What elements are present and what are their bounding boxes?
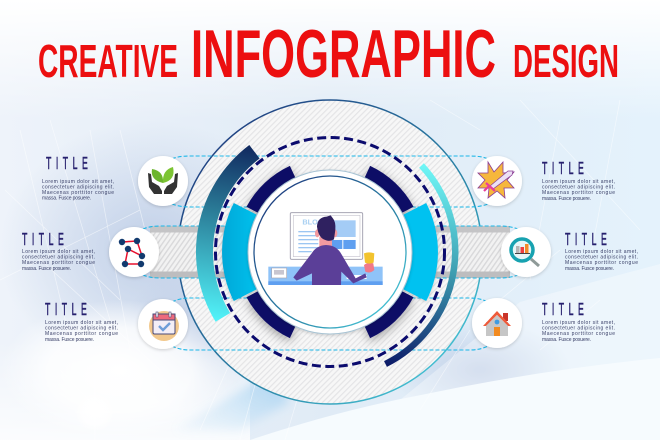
- cyan segments: [222, 203, 438, 301]
- text block: right middle: consectetuer adipiscing elit.: [565, 254, 638, 260]
- text block: left middle: Maecenas porttitor congue: [22, 260, 95, 266]
- text block: right bottom: massa. Fusce posuere.: [542, 337, 591, 343]
- text block: left bottom: Lorem ipsum dolor sit amet,: [45, 320, 118, 326]
- navy segments: [246, 166, 414, 338]
- central grey band: [150, 226, 510, 278]
- icon circle: calendar: [138, 299, 188, 349]
- text block: left middle: consectetuer adipiscing elit.: [22, 254, 95, 260]
- text block: right bottom: TITLE: [542, 299, 588, 319]
- text block: right bottom: Lorem ipsum dolor sit amet,: [542, 320, 615, 326]
- icon circle: sword star: [472, 156, 522, 206]
- text block: left bottom: massa. Fusce posuere.: [45, 337, 94, 343]
- text block: left middle: TITLE: [22, 229, 68, 249]
- text block: right top: TITLE: [542, 158, 588, 178]
- text block: left top: massa. Fusce posuere.: [42, 196, 91, 202]
- text block: right top: Lorem ipsum dolor sit amet,: [542, 179, 615, 185]
- icon circle: linked nodes: [109, 227, 159, 277]
- dashed connector lines: [143, 156, 518, 350]
- text block: right top: massa. Fusce posuere.: [542, 196, 591, 202]
- title: CREATIVE: [38, 35, 178, 87]
- gradient arc left: [196, 145, 260, 322]
- text block: right bottom: Maecenas porttitor congue: [542, 331, 615, 337]
- text block: right bottom: consectetuer adipiscing elit.: [542, 326, 615, 332]
- text block: left middle: [22, 229, 95, 272]
- person at desk illustration: [268, 213, 383, 285]
- desk: [268, 267, 383, 285]
- gradient arc right: [386, 166, 455, 364]
- icon circle: hands and leaves: [138, 156, 188, 206]
- text block: right bottom: [542, 299, 615, 343]
- text block: right top: [542, 158, 615, 202]
- title: [38, 16, 619, 92]
- central white disc: [248, 170, 412, 334]
- icon circle: magnifier chart: [501, 227, 551, 277]
- title: INFOGRAPHIC: [191, 16, 496, 92]
- text block: right middle: [565, 229, 638, 272]
- icon circle: house: [472, 298, 522, 348]
- outer hatched circle: [178, 100, 482, 404]
- person: [293, 215, 374, 285]
- text block: right middle: Maecenas porttitor congue: [565, 260, 638, 266]
- text block: left middle: Lorem ipsum dolor sit amet,: [22, 249, 95, 255]
- text block: left top: Maecenas porttitor congue: [42, 190, 114, 196]
- text block: right middle: massa. Fusce posuere.: [565, 266, 614, 272]
- text block: left bottom: TITLE: [45, 299, 91, 319]
- text block: left top: [42, 153, 114, 202]
- text block: left bottom: consectetuer adipiscing elit.: [45, 326, 118, 332]
- monitor: BLOG: [302, 217, 324, 226]
- text block: right top: Maecenas porttitor congue: [542, 190, 615, 196]
- text block: left top: TITLE: [46, 153, 92, 173]
- dashed ring: [216, 138, 444, 366]
- text block: left top: Lorem ipsum dolor sit amet,: [42, 179, 114, 185]
- text block: left bottom: Maecenas porttitor congue: [45, 331, 118, 337]
- text block: right top: consectetuer adipiscing elit.: [542, 184, 615, 190]
- text block: left middle: massa. Fusce posuere.: [22, 266, 71, 272]
- text block: right middle: Lorem ipsum dolor sit amet,: [565, 249, 638, 255]
- text block: left bottom: [45, 299, 118, 343]
- text block: right middle: TITLE: [565, 229, 611, 249]
- text block: left top: consectetuer adipiscing elit.: [42, 184, 114, 190]
